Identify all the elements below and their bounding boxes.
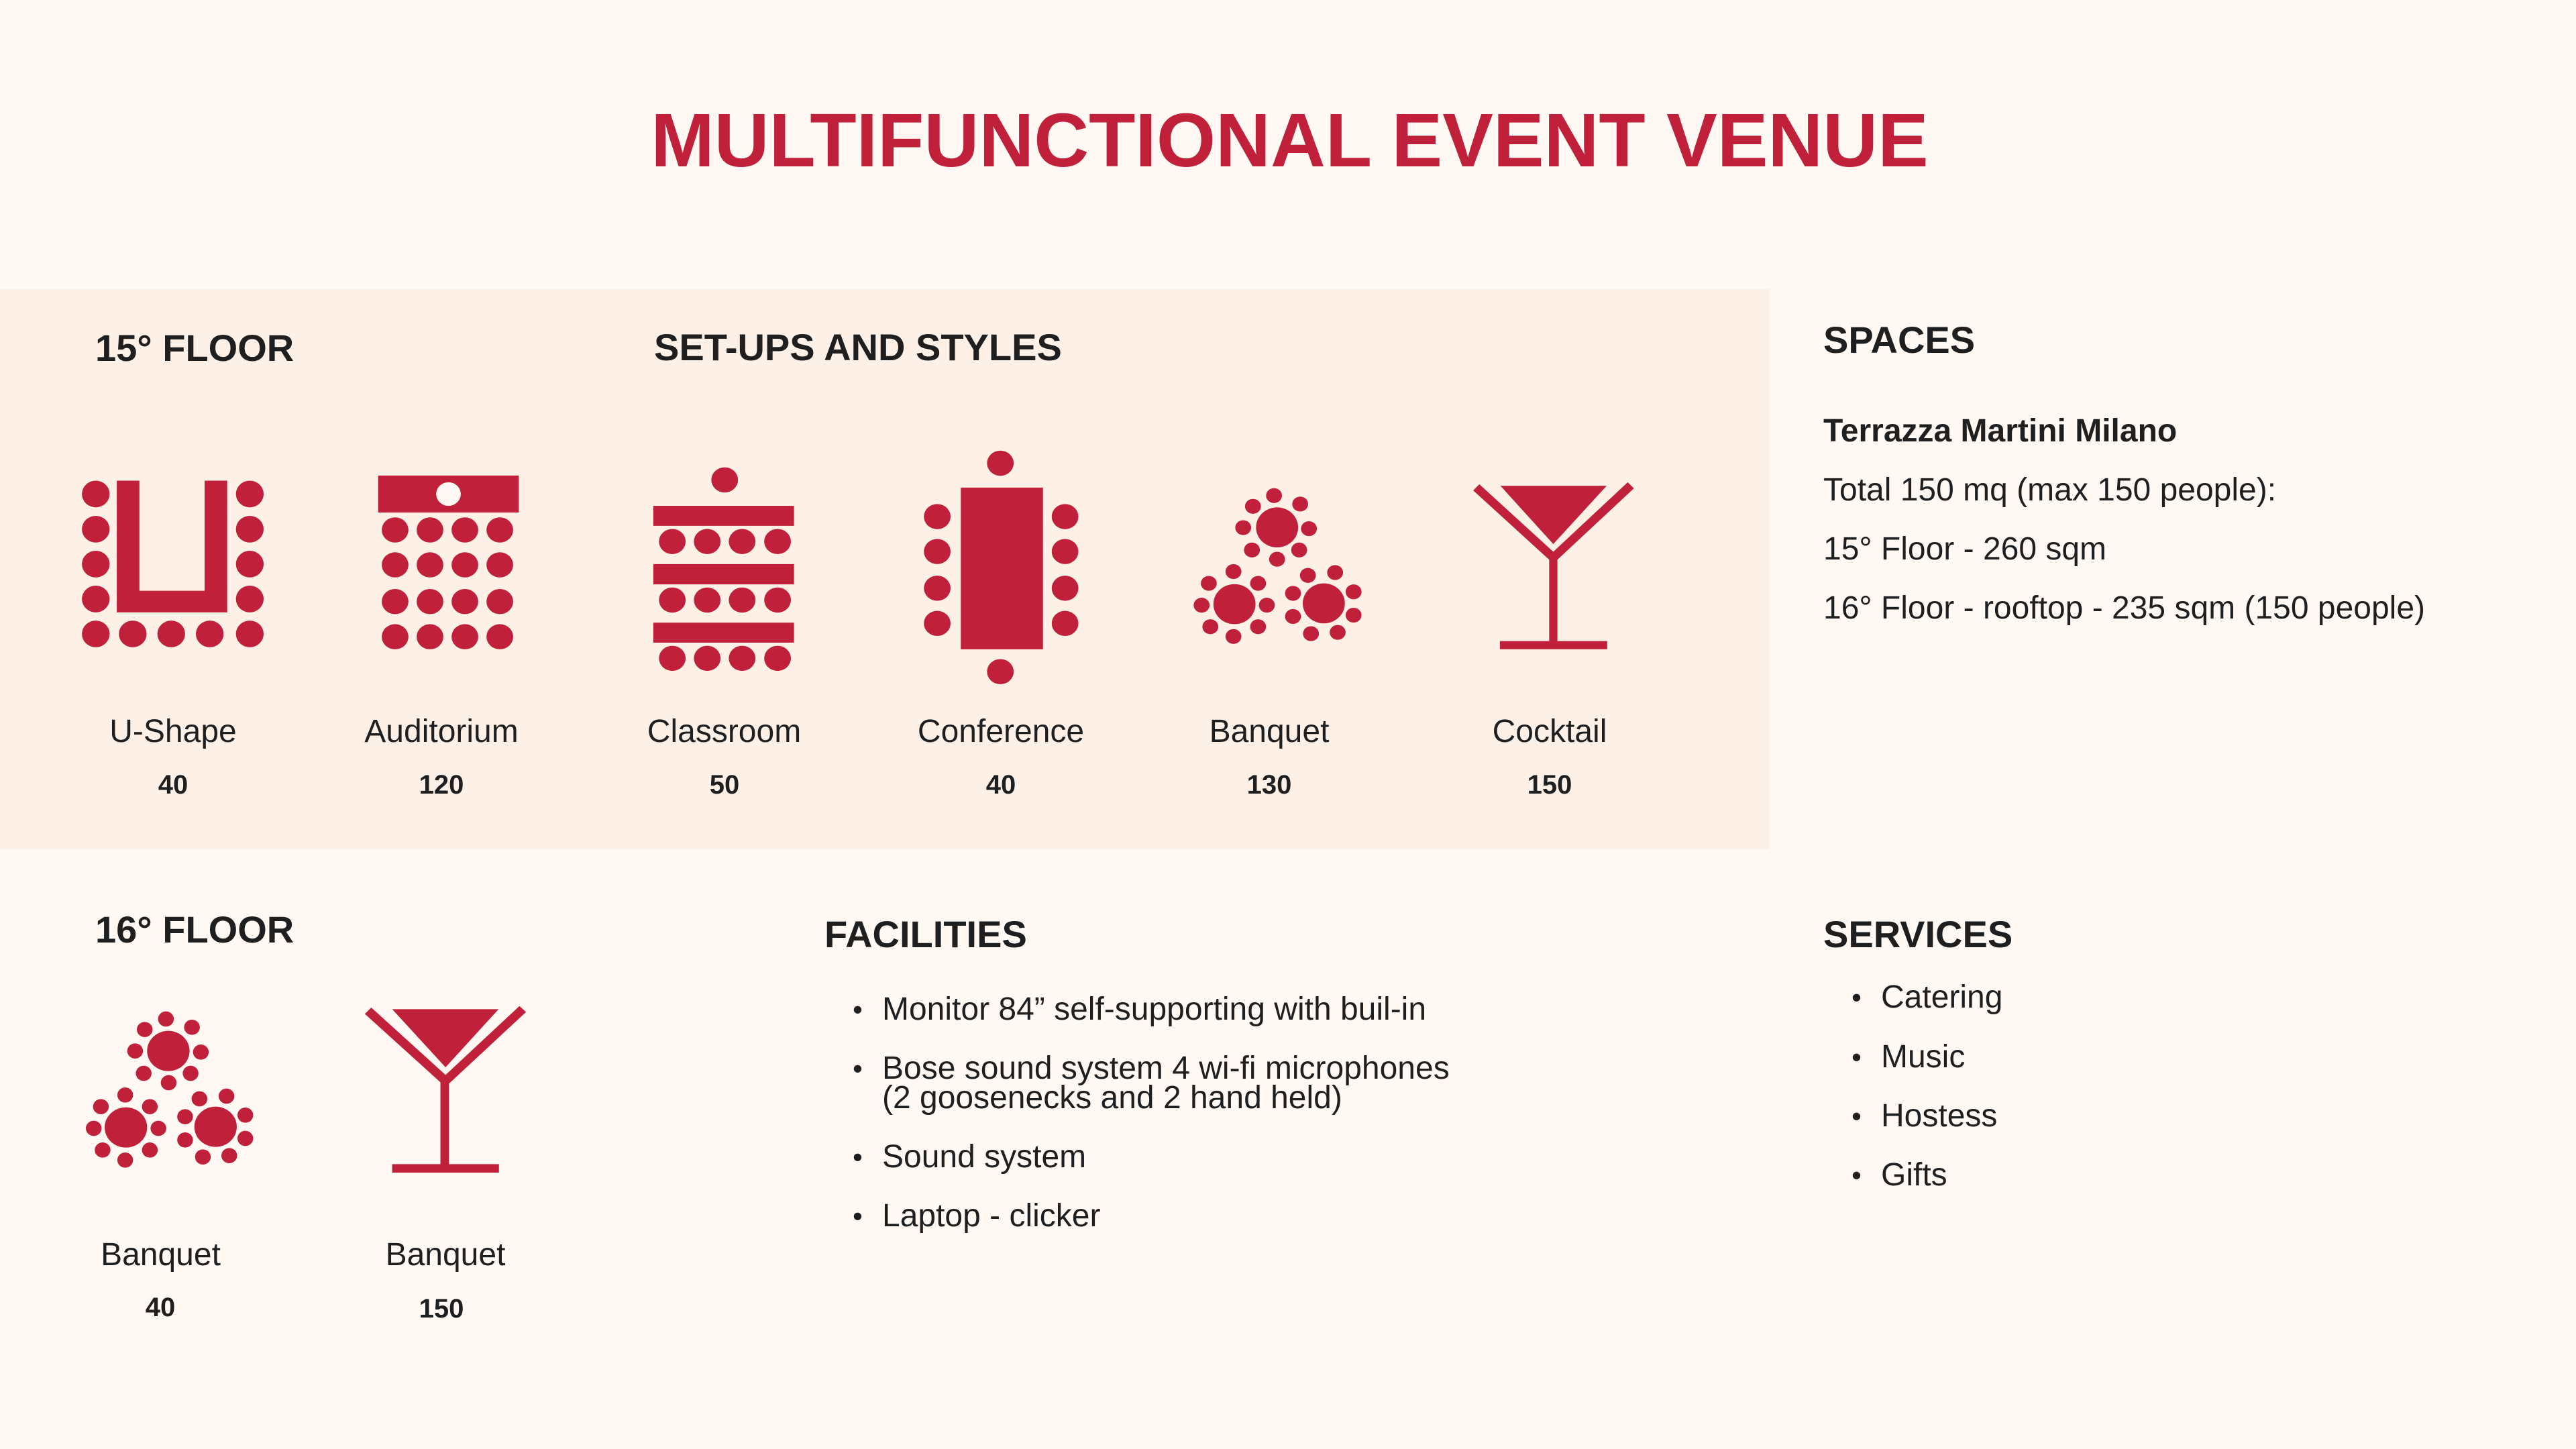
label: classroom: Classroom: [647, 714, 801, 749]
panel: 16th floor: [86, 908, 526, 1324]
panel: services: [1823, 913, 2012, 1193]
text: total: Total 150 mq (max 150 people):: [1823, 472, 2276, 508]
capacity: banquet 16 floor: 40: [146, 1293, 175, 1322]
title: MULTIFUNCTIONAL EVENT VENUE: [651, 98, 1929, 183]
list: services: •: [1851, 981, 1862, 1013]
capacity: classroom: 50: [710, 770, 739, 800]
label: banquet 16 floor: Banquet: [101, 1237, 221, 1273]
label: banquet: Banquet: [1210, 714, 1329, 749]
list: facilities: •: [853, 1053, 863, 1084]
list: facilities: (2 goosenecks and 2 hand held): [882, 1080, 1342, 1116]
list: services: Music: [1881, 1039, 1965, 1075]
panel: 15th floor set-ups: [0, 289, 1770, 849]
panel: facilities: [824, 913, 1450, 1234]
list: services: Hostess: [1881, 1098, 1997, 1134]
icon: classroom: [653, 468, 794, 671]
text: 15 floor area: 15° Floor - 260 sqm: [1823, 531, 2106, 567]
list: facilities: •: [853, 1141, 863, 1173]
list: facilities: Sound system: [882, 1139, 1086, 1175]
list: services: Gifts: [1881, 1157, 1947, 1193]
capacity: u-shape: 40: [158, 770, 188, 800]
list: facilities: •: [853, 994, 863, 1025]
heading: services: SERVICES: [1823, 913, 2012, 955]
icon: banquet: [1193, 488, 1362, 644]
label: cocktail: Cocktail: [1493, 714, 1607, 749]
list: facilities: Bose sound system 4 wi-fi microphones: [882, 1051, 1450, 1086]
list: services: •: [1851, 1100, 1862, 1132]
capacity: banquet: 130: [1247, 770, 1291, 800]
icon: auditorium: [378, 476, 519, 649]
capacity: conference: 40: [986, 770, 1016, 800]
panel: spaces: [1823, 319, 2425, 626]
list: facilities: •: [853, 1200, 863, 1232]
label: conference: Conference: [918, 714, 1084, 749]
icon: u-shape: [82, 481, 264, 647]
heading: spaces: SPACES: [1823, 319, 1975, 361]
capacity: second banquet 16 floor: 150: [419, 1294, 464, 1324]
icon: banquet 16 floor: [86, 1012, 253, 1168]
capacity: auditorium: 120: [419, 770, 464, 800]
icon: conference: [924, 451, 1079, 684]
heading: facilities: FACILITIES: [824, 913, 1027, 955]
text: venue name: Terrazza Martini Milano: [1823, 413, 2177, 449]
list: services: Catering: [1881, 979, 2002, 1015]
heading: 16 floor: 16° FLOOR: [95, 908, 294, 951]
label: second banquet 16 floor: Banquet: [386, 1237, 505, 1273]
label: u-shape: U-Shape: [109, 714, 237, 749]
list: services: •: [1851, 1041, 1862, 1073]
list: services: •: [1851, 1159, 1862, 1191]
capacity: cocktail: 150: [1527, 770, 1572, 800]
list: facilities: [853, 991, 1450, 1234]
list: services: [1851, 979, 2002, 1193]
icon: cocktail 16 floor: [365, 1006, 526, 1173]
heading: 15 floor: 15° FLOOR: [95, 327, 294, 369]
list: facilities: Laptop - clicker: [882, 1198, 1100, 1234]
heading: set-ups and styles: SET-UPS AND STYLES: [654, 326, 1062, 368]
label: auditorium: Auditorium: [364, 714, 519, 749]
list: facilities: Monitor 84” self-supporting with buil-in: [882, 991, 1426, 1027]
text: 16 floor area: 16° Floor - rooftop - 235 sqm (150 people): [1823, 590, 2425, 626]
icon: cocktail: [1473, 482, 1634, 649]
